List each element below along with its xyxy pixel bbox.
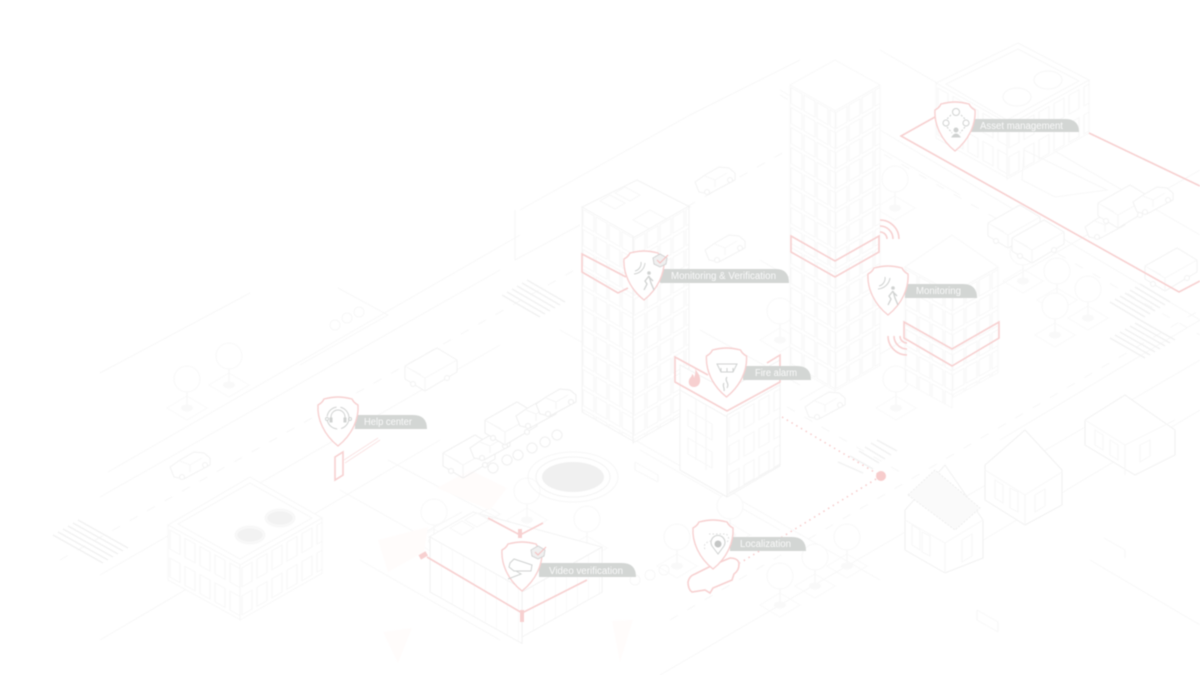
icon: asset network: [943, 108, 969, 137]
label pill: [539, 563, 636, 577]
crosswalks: [53, 280, 1175, 563]
shield: [502, 542, 542, 591]
houses: [905, 395, 1175, 573]
label pill: [905, 284, 977, 298]
highlight: fire alarm floor: [675, 355, 780, 411]
building: monitored block: [905, 235, 998, 408]
label text: Fire alarm: [755, 368, 797, 379]
shield: [706, 348, 747, 397]
label pill: [355, 415, 427, 429]
ground details: bollards and benches: [330, 307, 1125, 632]
shield: [624, 251, 664, 300]
label pill: [743, 366, 811, 380]
shield: [693, 520, 733, 569]
dotted route to tracked car: [740, 417, 881, 563]
shield: [318, 397, 358, 446]
icon: location pin: [704, 534, 729, 554]
label text: Video verification: [549, 566, 623, 577]
badge: asset management: [935, 102, 1079, 151]
label text: Help center: [364, 417, 413, 428]
distant vehicles: [170, 167, 1197, 480]
label text: Localization: [740, 539, 791, 550]
building: monitoring and verification tower: [582, 180, 690, 443]
icon: smoke detector: [717, 364, 737, 391]
highlight: tracked car outline: [688, 558, 739, 593]
icon: flame: [689, 368, 700, 387]
shield: [868, 266, 908, 315]
highlight: monitoring and verification floor: [582, 254, 628, 293]
label text: Monitoring & Verification: [671, 271, 776, 282]
badge: fire alarm: [706, 348, 811, 397]
highlight: monitoring floor: [904, 322, 999, 366]
shield: [935, 102, 975, 151]
trees: [167, 166, 1108, 617]
fountain: [528, 452, 618, 502]
badge: monitoring: [868, 266, 977, 315]
highlight: video verification perimeter: [419, 518, 587, 622]
icon: wireless signal upper: [880, 220, 899, 239]
building: central tower: [790, 60, 880, 391]
badge: video verification: [502, 542, 636, 591]
marker: location dot: [876, 471, 886, 481]
highlight: asset management zone: [901, 117, 1200, 292]
icon: signal and person: [634, 254, 668, 290]
icon: signal and person: [878, 277, 898, 305]
pale coverage zones: [378, 470, 633, 663]
label pill: [970, 119, 1079, 132]
building: help center office: [168, 477, 322, 620]
icon: camera: [508, 546, 546, 579]
label text: Asset management: [980, 121, 1063, 132]
badge: monitoring and verification: [624, 251, 789, 300]
icon: headset: [326, 407, 352, 429]
building: fire alarm apartment: [680, 360, 780, 497]
parked vehicles near fountain: [443, 389, 576, 478]
label text: Monitoring: [916, 286, 961, 297]
badge: help center: [318, 397, 427, 446]
label pill: [660, 269, 789, 283]
highlight: central tower floor: [791, 236, 879, 277]
icon: wireless signal lower: [888, 336, 907, 355]
label pill: [730, 537, 806, 551]
barrier: help center gate: [335, 438, 380, 480]
building: asset management depot: [936, 43, 1107, 197]
badge: localization: [693, 520, 806, 569]
building: video verification hall: [429, 508, 602, 644]
